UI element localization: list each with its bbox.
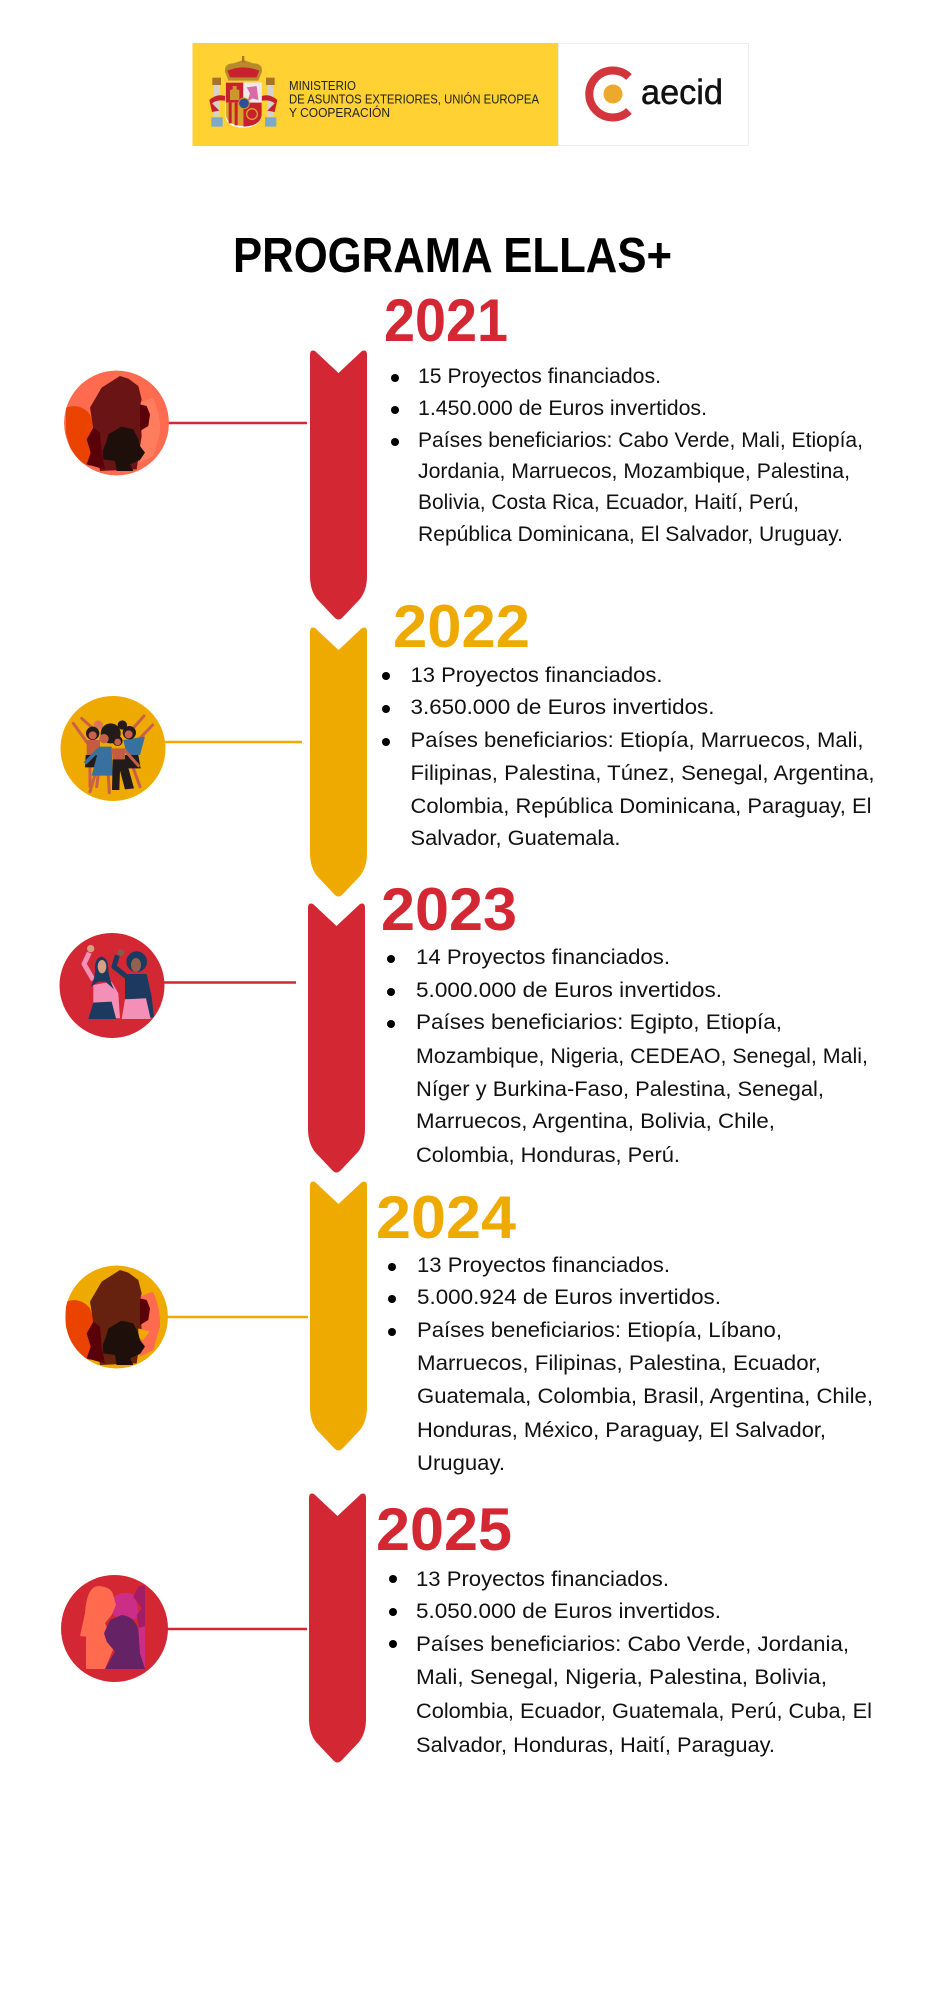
connector 2022 xyxy=(160,741,302,743)
bullet list 2025: Mali, Senegal, Nigeria, Palestina, Bolivia, xyxy=(416,1666,827,1689)
bullet list 2025: 5.050.000 de Euros invertidos. xyxy=(416,1600,721,1623)
bullet list 2022: 3.650.000 de Euros invertidos. xyxy=(410,696,714,719)
bullet list 2024: Honduras, México, Paraguay, El Salvador, xyxy=(417,1419,826,1442)
icon: silhouettes of women, red xyxy=(61,1575,168,1682)
panel: 2024 xyxy=(65,1182,873,1475)
arrow 2021 xyxy=(310,350,367,620)
bullet list 2022: Colombia, República Dominicana, Paraguay, El xyxy=(410,795,872,818)
ministerio text: Y COOPERACIÓN xyxy=(289,105,390,120)
aecid wordmark: aecid xyxy=(641,73,723,112)
arrow 2022 xyxy=(310,628,367,896)
bullet list 2023: Marruecos, Argentina, Bolivia, Chile, xyxy=(416,1110,775,1133)
panel: 2022 xyxy=(60,593,874,896)
bullet list 2024: Países beneficiarios: Etiopía, Líbano, xyxy=(417,1319,782,1342)
year 2022: 2022 xyxy=(393,593,530,660)
connector 2025 xyxy=(165,1628,307,1630)
title: PROGRAMA ELLAS+ xyxy=(233,229,672,283)
bullet list 2022: Filipinas, Palestina, Túnez, Senegal, Argentina, xyxy=(410,762,874,785)
bullet list 2022: Salvador, Guatemala. xyxy=(410,827,620,850)
icon: silhouettes of women, salmon xyxy=(64,370,169,476)
year 2025: 2025 xyxy=(376,1496,512,1563)
bullet list 2023: 5.000.000 de Euros invertidos. xyxy=(416,979,722,1002)
year 2021: 2021 xyxy=(384,287,508,354)
year 2024: 2024 xyxy=(376,1184,517,1251)
bullet list 2025 xyxy=(389,1568,872,1757)
panel: 2021 xyxy=(64,287,863,620)
icon: group of women xyxy=(60,696,166,801)
bullet list 2021: Países beneficiarios: Cabo Verde, Mali, Etiopía, xyxy=(418,429,863,452)
year 2023: 2023 xyxy=(381,876,517,943)
icon: aecid ring xyxy=(589,70,629,117)
bullet list 2025: Salvador, Honduras, Haití, Paraguay. xyxy=(416,1734,775,1757)
logo: ministerio xyxy=(192,43,558,146)
bullet list 2022 xyxy=(382,664,874,850)
icon: two women raising fists xyxy=(60,933,164,1038)
panel: 2025 xyxy=(61,1494,872,1762)
ministerio text: DE ASUNTOS EXTERIORES, UNIÓN EUROPEA xyxy=(289,92,539,106)
bullet list 2022: Países beneficiarios: Etiopía, Marruecos, Mali, xyxy=(410,729,864,752)
bullet list 2023: Níger y Burkina-Faso, Palestina, Senegal, xyxy=(416,1078,824,1101)
bullet list 2024: Guatemala, Colombia, Brasil, Argentina, Chile, xyxy=(417,1385,873,1408)
bullet list 2021 xyxy=(391,365,863,546)
bullet list 2025: 13 Proyectos financiados. xyxy=(416,1568,669,1591)
connector 2023 xyxy=(160,981,296,984)
connector 2021 xyxy=(165,422,307,424)
bullet list 2024: 13 Proyectos financiados. xyxy=(417,1254,670,1277)
bullet list 2022: 13 Proyectos financiados. xyxy=(410,664,662,687)
logo: aecid xyxy=(558,44,748,146)
arrow 2023 xyxy=(308,904,365,1172)
arrow 2024 xyxy=(310,1182,367,1450)
bullet list 2024 xyxy=(388,1254,873,1475)
bullet list 2024: Uruguay. xyxy=(417,1452,505,1475)
icon: silhouettes of women, yellow xyxy=(65,1266,168,1368)
arrow 2025 xyxy=(309,1494,366,1762)
bullet list 2023 xyxy=(387,946,868,1167)
ministerio text xyxy=(289,78,539,120)
bullet list 2025: Colombia, Ecuador, Guatemala, Perú, Cuba, El xyxy=(416,1700,872,1723)
bullet list 2021: 15 Proyectos financiados. xyxy=(418,365,661,388)
ministerio text: MINISTERIO xyxy=(289,78,356,93)
bullet list 2021: República Dominicana, El Salvador, Uruguay. xyxy=(418,523,843,546)
bullet list 2025: Países beneficiarios: Cabo Verde, Jordania, xyxy=(416,1633,849,1656)
bullet list 2021: 1.450.000 de Euros invertidos. xyxy=(418,397,707,420)
bullet list 2024: 5.000.924 de Euros invertidos. xyxy=(417,1286,721,1309)
bullet list 2023: 14 Proyectos financiados. xyxy=(416,946,670,969)
bullet list 2023: Mozambique, Nigeria, CEDEAO, Senegal, Mali, xyxy=(416,1045,868,1068)
bullet list 2021: Jordania, Marruecos, Mozambique, Palestina, xyxy=(418,460,850,483)
bullet list 2023: Colombia, Honduras, Perú. xyxy=(416,1144,680,1167)
bullet list 2021: Bolivia, Costa Rica, Ecuador, Haití, Perú, xyxy=(418,491,799,514)
bullet list 2023: Países beneficiarios: Egipto, Etiopía, xyxy=(416,1011,782,1034)
bullet list 2024: Marruecos, Filipinas, Palestina, Ecuador, xyxy=(417,1352,821,1375)
logos header xyxy=(192,43,748,146)
icon: coat of arms of Spain xyxy=(209,56,277,128)
connector 2024 xyxy=(165,1316,308,1318)
panel: 2023 xyxy=(60,876,868,1172)
